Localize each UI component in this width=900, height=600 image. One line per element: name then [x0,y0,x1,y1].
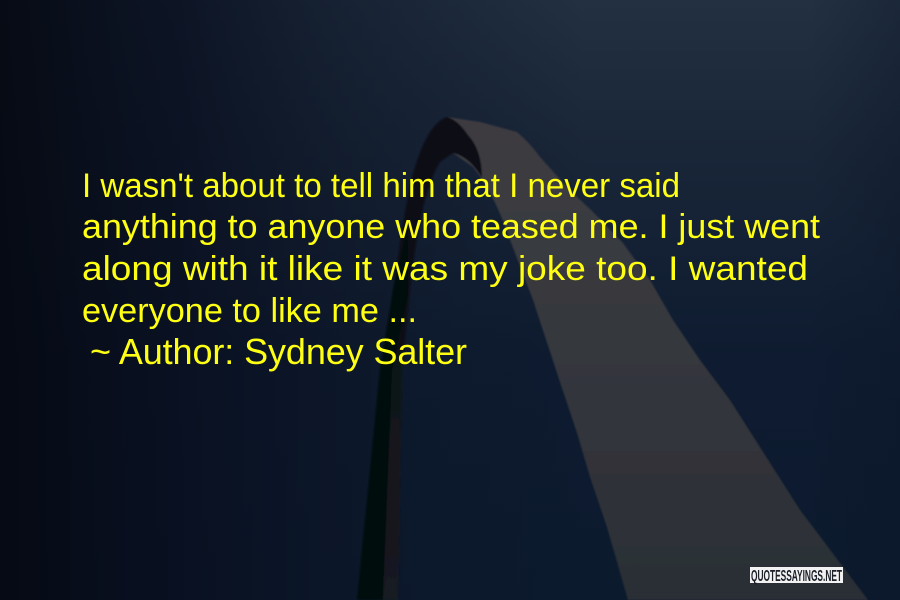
line 4: everyone to like me ... [82,292,417,330]
line 3: along with it like it was my joke too. I wanted [82,250,808,288]
arch: shadowed inner face [357,117,482,600]
line 2: anything to anyone who teased me. I just went [82,208,821,246]
line 1: I wasn't about to tell him that I never said [82,167,680,205]
quote text [82,167,821,330]
watermark [750,567,843,585]
arch: lit face [447,117,868,600]
arch [357,117,868,600]
arch: black core of left leg [357,225,408,600]
author: ~ Author: Sydney Salter [90,331,467,372]
